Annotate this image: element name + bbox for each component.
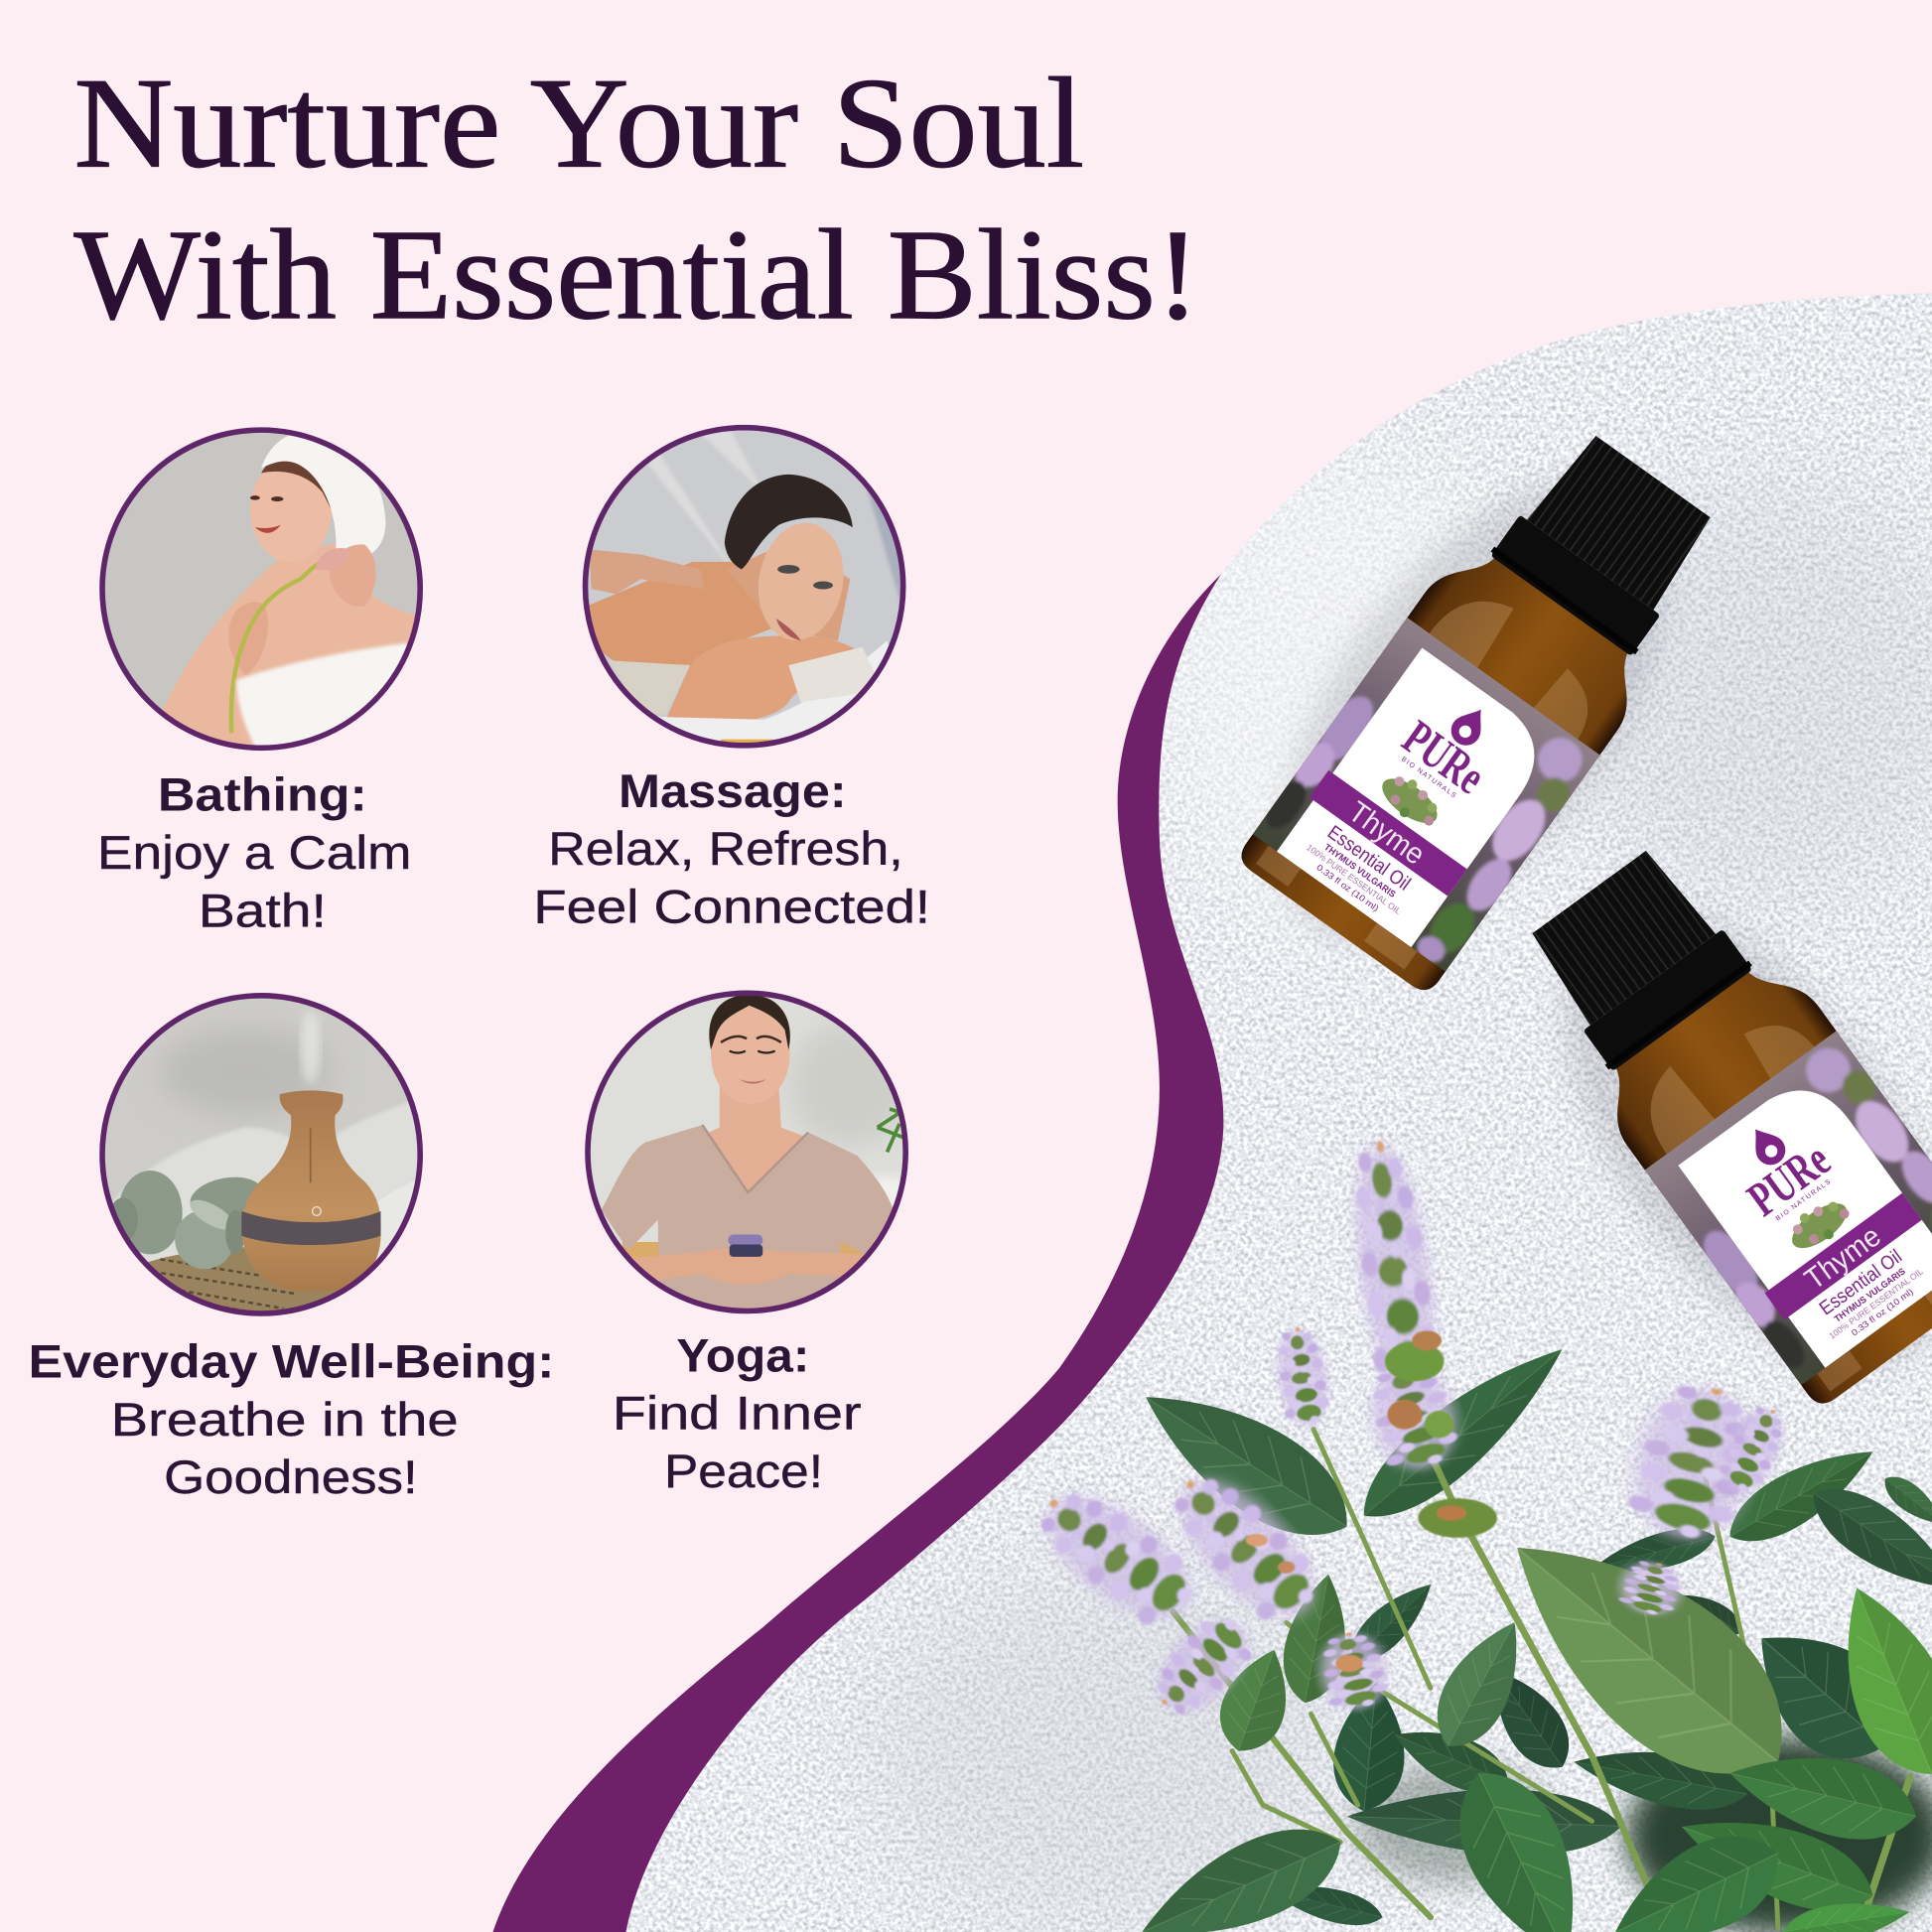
everyday well-being caption (29, 1335, 554, 1503)
yoga caption: Yoga: (676, 1328, 809, 1381)
title: With Essential Bliss! (73, 204, 1200, 346)
bottle label lines: 0.33 fl oz (10 ml) (1850, 1287, 1915, 1338)
massage caption: Relax, Refresh, (548, 822, 903, 875)
yoga caption: Find Inner (613, 1387, 862, 1440)
massage caption: Massage: (619, 764, 847, 817)
upper leaves (1123, 1324, 1932, 1612)
flower spikes (1024, 1137, 1794, 1728)
seed clusters (1246, 1330, 1497, 1672)
massage caption: Feel Connected! (533, 881, 930, 933)
bottle label lines: Thyme (1342, 795, 1431, 872)
bottle label lines: Essential Oil (1323, 821, 1414, 896)
dark leaves (1265, 1571, 1919, 1932)
everyday well-being caption: Goodness! (164, 1450, 418, 1503)
mint plant with flowers (1024, 1137, 1932, 1932)
mid leaves (1126, 1491, 1932, 1932)
photo circle: bathing (98, 425, 425, 755)
stone surface panel (617, 283, 1932, 1932)
photo circle: diffuser (99, 993, 423, 1316)
photo circle: yoga (584, 988, 931, 1318)
bottle: lower (1471, 818, 1932, 1431)
stems (1173, 1430, 1910, 1928)
bottle label lines: Thyme (1799, 1220, 1887, 1297)
bathing caption: Bathing: (158, 768, 367, 821)
bottle label lines: THYMUS VULGARIS (1322, 842, 1398, 899)
bottle label lines (1754, 1166, 1931, 1349)
everyday well-being caption: Breathe in the (111, 1393, 459, 1446)
everyday well-being caption: Everyday Well-Being: (29, 1335, 554, 1388)
massage caption (533, 764, 930, 933)
bottle logo: PURe (1393, 710, 1495, 804)
bottle label lines: 100% PURE ESSENTIAL OIL (1305, 842, 1403, 916)
bottle label lines: 0.33 fl oz (10 ml) (1314, 863, 1381, 913)
yoga caption: Peace! (664, 1445, 823, 1497)
title: Nurture Your Soul (73, 53, 1084, 196)
bottle: upper (1209, 392, 1755, 1006)
bottle label lines: BIO NATURALS (1775, 1177, 1833, 1223)
bottle label lines (1299, 741, 1475, 925)
bathing caption: Enjoy a Calm (97, 826, 412, 879)
purple wave band (492, 574, 1223, 1932)
bottle logo: PURe (1737, 1132, 1840, 1227)
bathing caption: Bath! (199, 884, 327, 936)
bathing caption (97, 768, 412, 936)
photo circle: massage (582, 424, 918, 752)
bottle label lines: THYMUS VULGARIS (1833, 1266, 1907, 1324)
bottle label lines: BIO NATURALS (1400, 756, 1458, 800)
yoga caption (613, 1328, 862, 1497)
title (73, 53, 1200, 346)
bottle label lines: Essential Oil (1816, 1246, 1906, 1319)
bottle label lines: 100% PURE ESSENTIAL OIL (1827, 1266, 1925, 1341)
